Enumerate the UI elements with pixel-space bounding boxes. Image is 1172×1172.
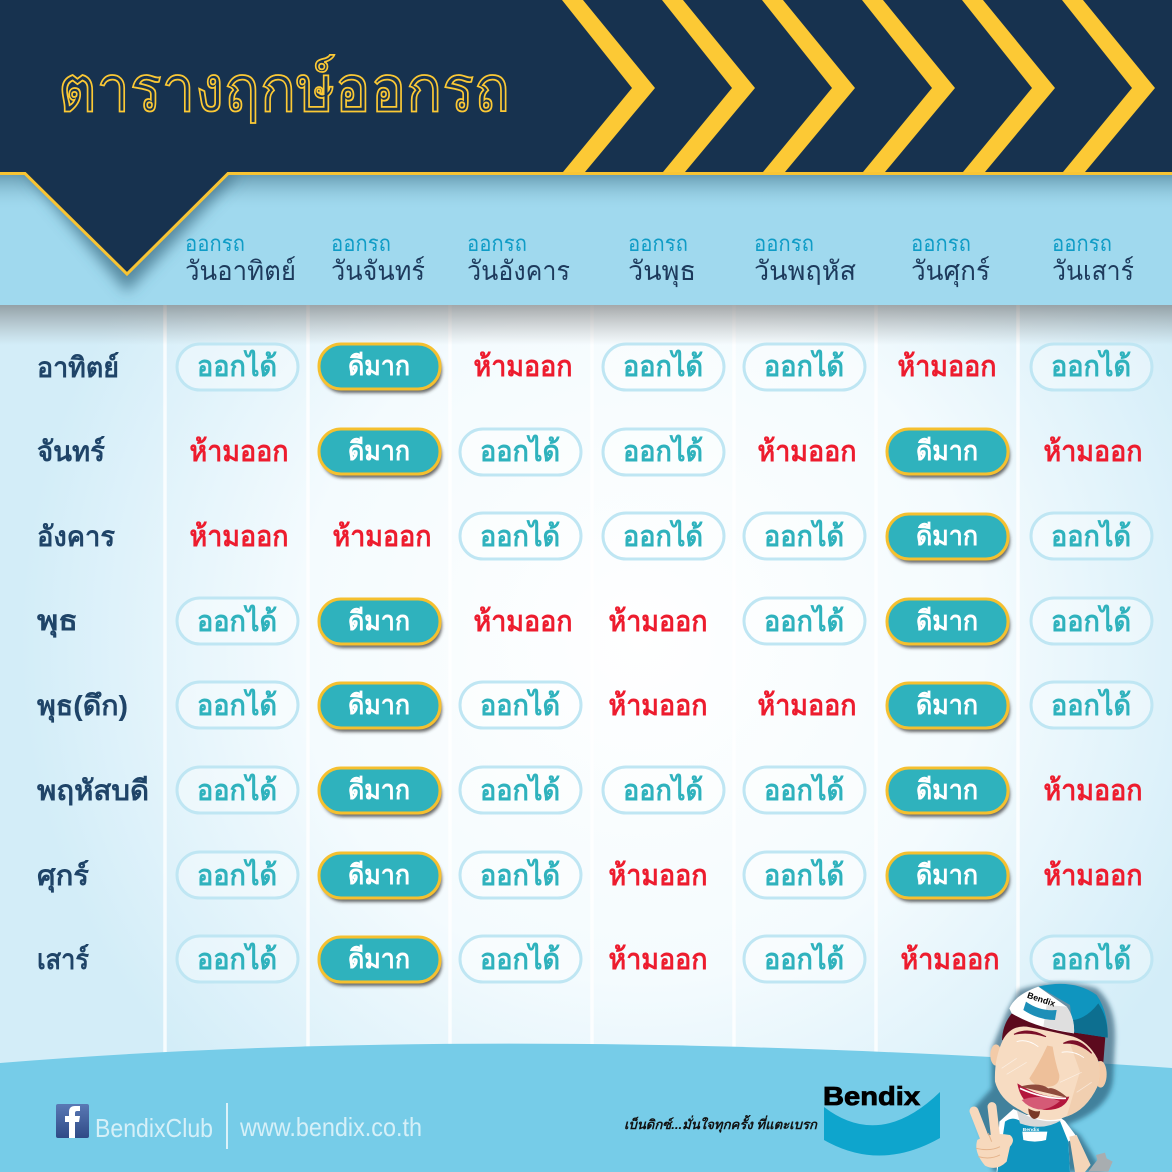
heading: Thursday: ออกรถ [754, 231, 814, 256]
row: Friday [37, 852, 1142, 902]
header banner: navy [0, 0, 1172, 275]
heading: Wednesday [628, 231, 696, 288]
column headings [185, 231, 1134, 288]
row: Wednesday night: ดีมาก [348, 690, 410, 720]
mascot wrench [1088, 1153, 1113, 1172]
row: Saturday: ออกได้ [764, 942, 844, 976]
row: Tuesday: ออกได้ [623, 519, 703, 553]
row: Thursday: ออกได้ [480, 773, 560, 807]
row: Friday: ออกได้ [764, 858, 844, 892]
heading: Saturday: วันเสาร์ [1052, 255, 1134, 286]
row: Wednesday night: ออกได้ [1051, 688, 1131, 722]
row: Monday: ดีมาก [916, 436, 978, 466]
heading: Sunday: ออกรถ [185, 231, 245, 256]
row: Sunday: ออกได้ [764, 349, 844, 383]
row: Tuesday: ห้ามออก [190, 521, 288, 553]
row: Thursday: ดีมาก [348, 775, 410, 805]
row: Wednesday: ออกได้ [764, 604, 844, 638]
heading: Sunday: วันอาทิตย์ [185, 255, 296, 286]
row: Wednesday night: ดีมาก [916, 690, 978, 720]
row: Tuesday: ดีมาก [916, 521, 978, 551]
row: Saturday: เสาร์ [37, 944, 89, 975]
row: Wednesday [37, 598, 1152, 648]
row: Saturday [37, 936, 1152, 986]
row: Friday: ศุกร์ [37, 860, 89, 893]
row: Friday: ดีมาก [348, 860, 410, 890]
row: Sunday: อาทิตย์ [37, 352, 119, 383]
row: Friday: ห้ามออก [1044, 860, 1142, 892]
header band: light blue [0, 172, 1172, 305]
footer band [0, 1044, 1172, 1172]
row: Wednesday: ห้ามออก [474, 606, 572, 638]
mascot cap: Bendix [1026, 990, 1057, 1009]
table background [0, 300, 1172, 1080]
mascot head [990, 1012, 1107, 1120]
row: Saturday: ออกได้ [197, 942, 277, 976]
heading: Monday: ออกรถ [331, 231, 391, 256]
row: Sunday: ออกได้ [1051, 349, 1131, 383]
heading: Tuesday: ออกรถ [467, 231, 527, 256]
row: Friday: ดีมาก [916, 860, 978, 890]
mascot body [997, 1109, 1091, 1172]
row: Wednesday: ห้ามออก [608, 606, 708, 638]
row: Saturday: ออกได้ [1051, 942, 1131, 976]
heading: Monday [331, 231, 425, 286]
row: Wednesday night: ห้ามออก [758, 690, 856, 722]
heading: Saturday: ออกรถ [1052, 231, 1112, 256]
heading: Wednesday: ออกรถ [628, 231, 688, 256]
heading: Tuesday [467, 231, 570, 286]
row: Sunday: ห้ามออก [898, 351, 996, 383]
row: Sunday: ออกได้ [623, 349, 703, 383]
heading: Thursday [754, 231, 856, 286]
row: Monday: ห้ามออก [190, 436, 288, 468]
website: www.bendix.co.th [239, 1112, 422, 1142]
row: Monday: ออกได้ [480, 434, 560, 468]
row: Friday: ออกได้ [480, 858, 560, 892]
row: Thursday: ดีมาก [916, 775, 978, 805]
heading: Wednesday: วันพุธ [628, 256, 696, 288]
row: Thursday: ออกได้ [764, 773, 844, 807]
logo: Bendix: Bendix [823, 1081, 921, 1111]
row: Wednesday: ดีมาก [348, 606, 410, 636]
mascot [973, 983, 1115, 1172]
row: Saturday: ดีมาก [348, 944, 410, 974]
row: Wednesday night: ห้ามออก [608, 690, 708, 722]
heading: Thursday: วันพฤหัส [754, 256, 856, 286]
row: Friday: ห้ามออก [608, 860, 708, 892]
row: Sunday: ออกได้ [197, 349, 277, 383]
row: Monday: ออกได้ [623, 434, 703, 468]
row: Sunday: ดีมาก [348, 351, 410, 381]
heading: Friday: ออกรถ [911, 231, 971, 256]
row: Wednesday night [37, 682, 1152, 732]
row: Wednesday night: ออกได้ [197, 688, 277, 722]
row: Tuesday: อังคาร [37, 521, 115, 552]
row: Thursday: ห้ามออก [1044, 775, 1142, 807]
row: Wednesday: พุธ [37, 605, 78, 638]
row: Wednesday: ออกได้ [197, 604, 277, 638]
row: Monday: ห้ามออก [1044, 436, 1142, 468]
mascot hand [974, 1107, 1013, 1168]
row: Wednesday: ดีมาก [916, 606, 978, 636]
row: Monday [37, 429, 1142, 478]
heading: Monday: วันจันทร์ [331, 255, 425, 286]
row: Thursday: ออกได้ [197, 773, 277, 807]
row: Sunday [37, 344, 1152, 393]
mascot shadow [973, 983, 1115, 1172]
heading: Sunday [185, 231, 296, 286]
logo: Bendix [823, 1081, 940, 1156]
row: Monday: ดีมาก [348, 436, 410, 466]
row: Tuesday: ออกได้ [764, 519, 844, 553]
row: Thursday: พฤหัสบดี [37, 775, 149, 806]
row: Saturday: ห้ามออก [900, 944, 1000, 976]
mascot cap [1009, 984, 1108, 1038]
slogan: เบ็นดิกซ์...มั่นใจทุกครั้ง ที่แตะเบรก [624, 1114, 818, 1133]
row: Saturday: ห้ามออก [608, 944, 708, 976]
row: Tuesday [37, 513, 1152, 563]
mascot body: Bendix [1023, 1127, 1040, 1133]
row: Friday: ออกได้ [197, 858, 277, 892]
row: Saturday: ออกได้ [480, 942, 560, 976]
title: ตารางฤกษ์ออกรถ [58, 53, 510, 125]
row: Tuesday: ออกได้ [1051, 519, 1131, 553]
row: Tuesday: ห้ามออก [332, 521, 432, 553]
row: Tuesday: ออกได้ [480, 519, 560, 553]
chevrons [562, 0, 1155, 172]
facebook name: BendixClub [95, 1113, 213, 1143]
row: Wednesday night: ออกได้ [480, 688, 560, 722]
heading: Friday [911, 231, 990, 288]
row: Sunday: ห้ามออก [474, 351, 572, 383]
heading: Saturday [1052, 231, 1134, 286]
row: Monday: จันทร์ [37, 436, 105, 467]
heading: Friday: วันศุกร์ [911, 255, 990, 288]
row: Wednesday night: พุธ(ดึก) [37, 690, 128, 723]
row: Monday: ห้ามออก [758, 436, 856, 468]
row: Thursday [37, 767, 1142, 817]
row: Wednesday: ออกได้ [1051, 604, 1131, 638]
row: Thursday: ออกได้ [623, 773, 703, 807]
icon: facebook [56, 1104, 89, 1138]
heading: Tuesday: วันอังคาร [467, 256, 570, 286]
